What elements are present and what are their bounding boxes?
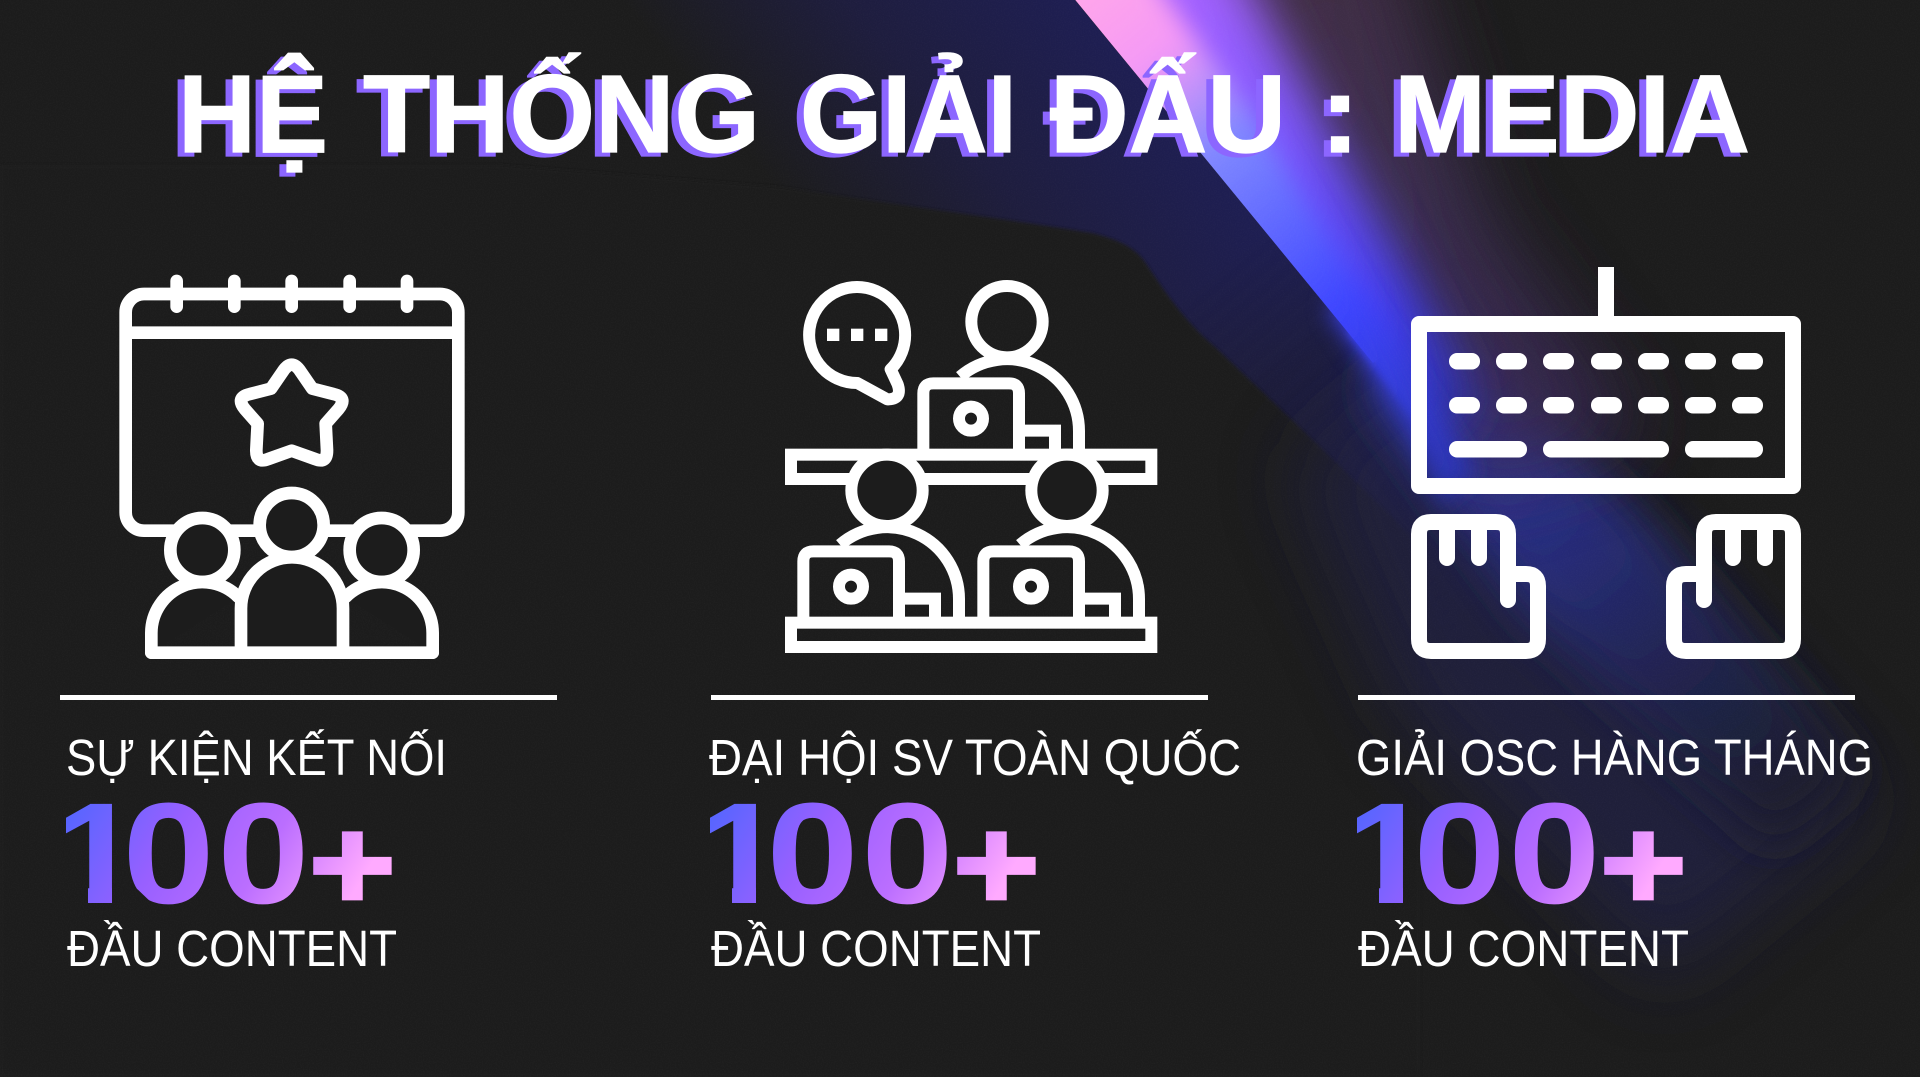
title: MEDIA <box>1394 53 1750 176</box>
background shape: dark blob <box>0 165 1420 1077</box>
number: 100+: 100+ <box>695 773 1039 936</box>
panel: đại hội sv toàn quốc <box>695 695 1241 977</box>
label: đại hội sv toàn quốc: ĐẠI HỘI SV TOÀN QUỐC <box>709 728 1241 786</box>
title <box>178 51 1750 176</box>
title: THỐNG <box>363 52 760 176</box>
background glow: navy side of light beam <box>676 0 1393 494</box>
title: HỆ <box>178 52 328 176</box>
label: đầu content: ĐẦU CONTENT <box>1358 919 1689 977</box>
label: giải osc hàng tháng: GIẢI OSC HÀNG THÁNG <box>1356 728 1873 786</box>
label: đầu content: ĐẦU CONTENT <box>67 919 397 977</box>
icon: keyboard and hands <box>1419 267 1793 651</box>
icon: calendar with star and audience <box>126 281 458 653</box>
panel: sự kiện kết nối <box>51 695 557 977</box>
title: ĐẤU <box>1050 51 1286 176</box>
title: : <box>1320 53 1360 176</box>
panel: giải osc hàng tháng <box>1342 695 1873 977</box>
icon: team working on laptops with speech bubble <box>791 286 1151 647</box>
title: GIẢI <box>800 52 1017 176</box>
number: 100+: 100+ <box>1342 773 1686 936</box>
number: 100+: 100+ <box>51 773 395 936</box>
label: đầu content: ĐẦU CONTENT <box>711 919 1041 977</box>
label: sự kiện kết nối: SỰ KIỆN KẾT NỐI <box>66 728 447 786</box>
background: light beam <box>1075 0 1891 1000</box>
